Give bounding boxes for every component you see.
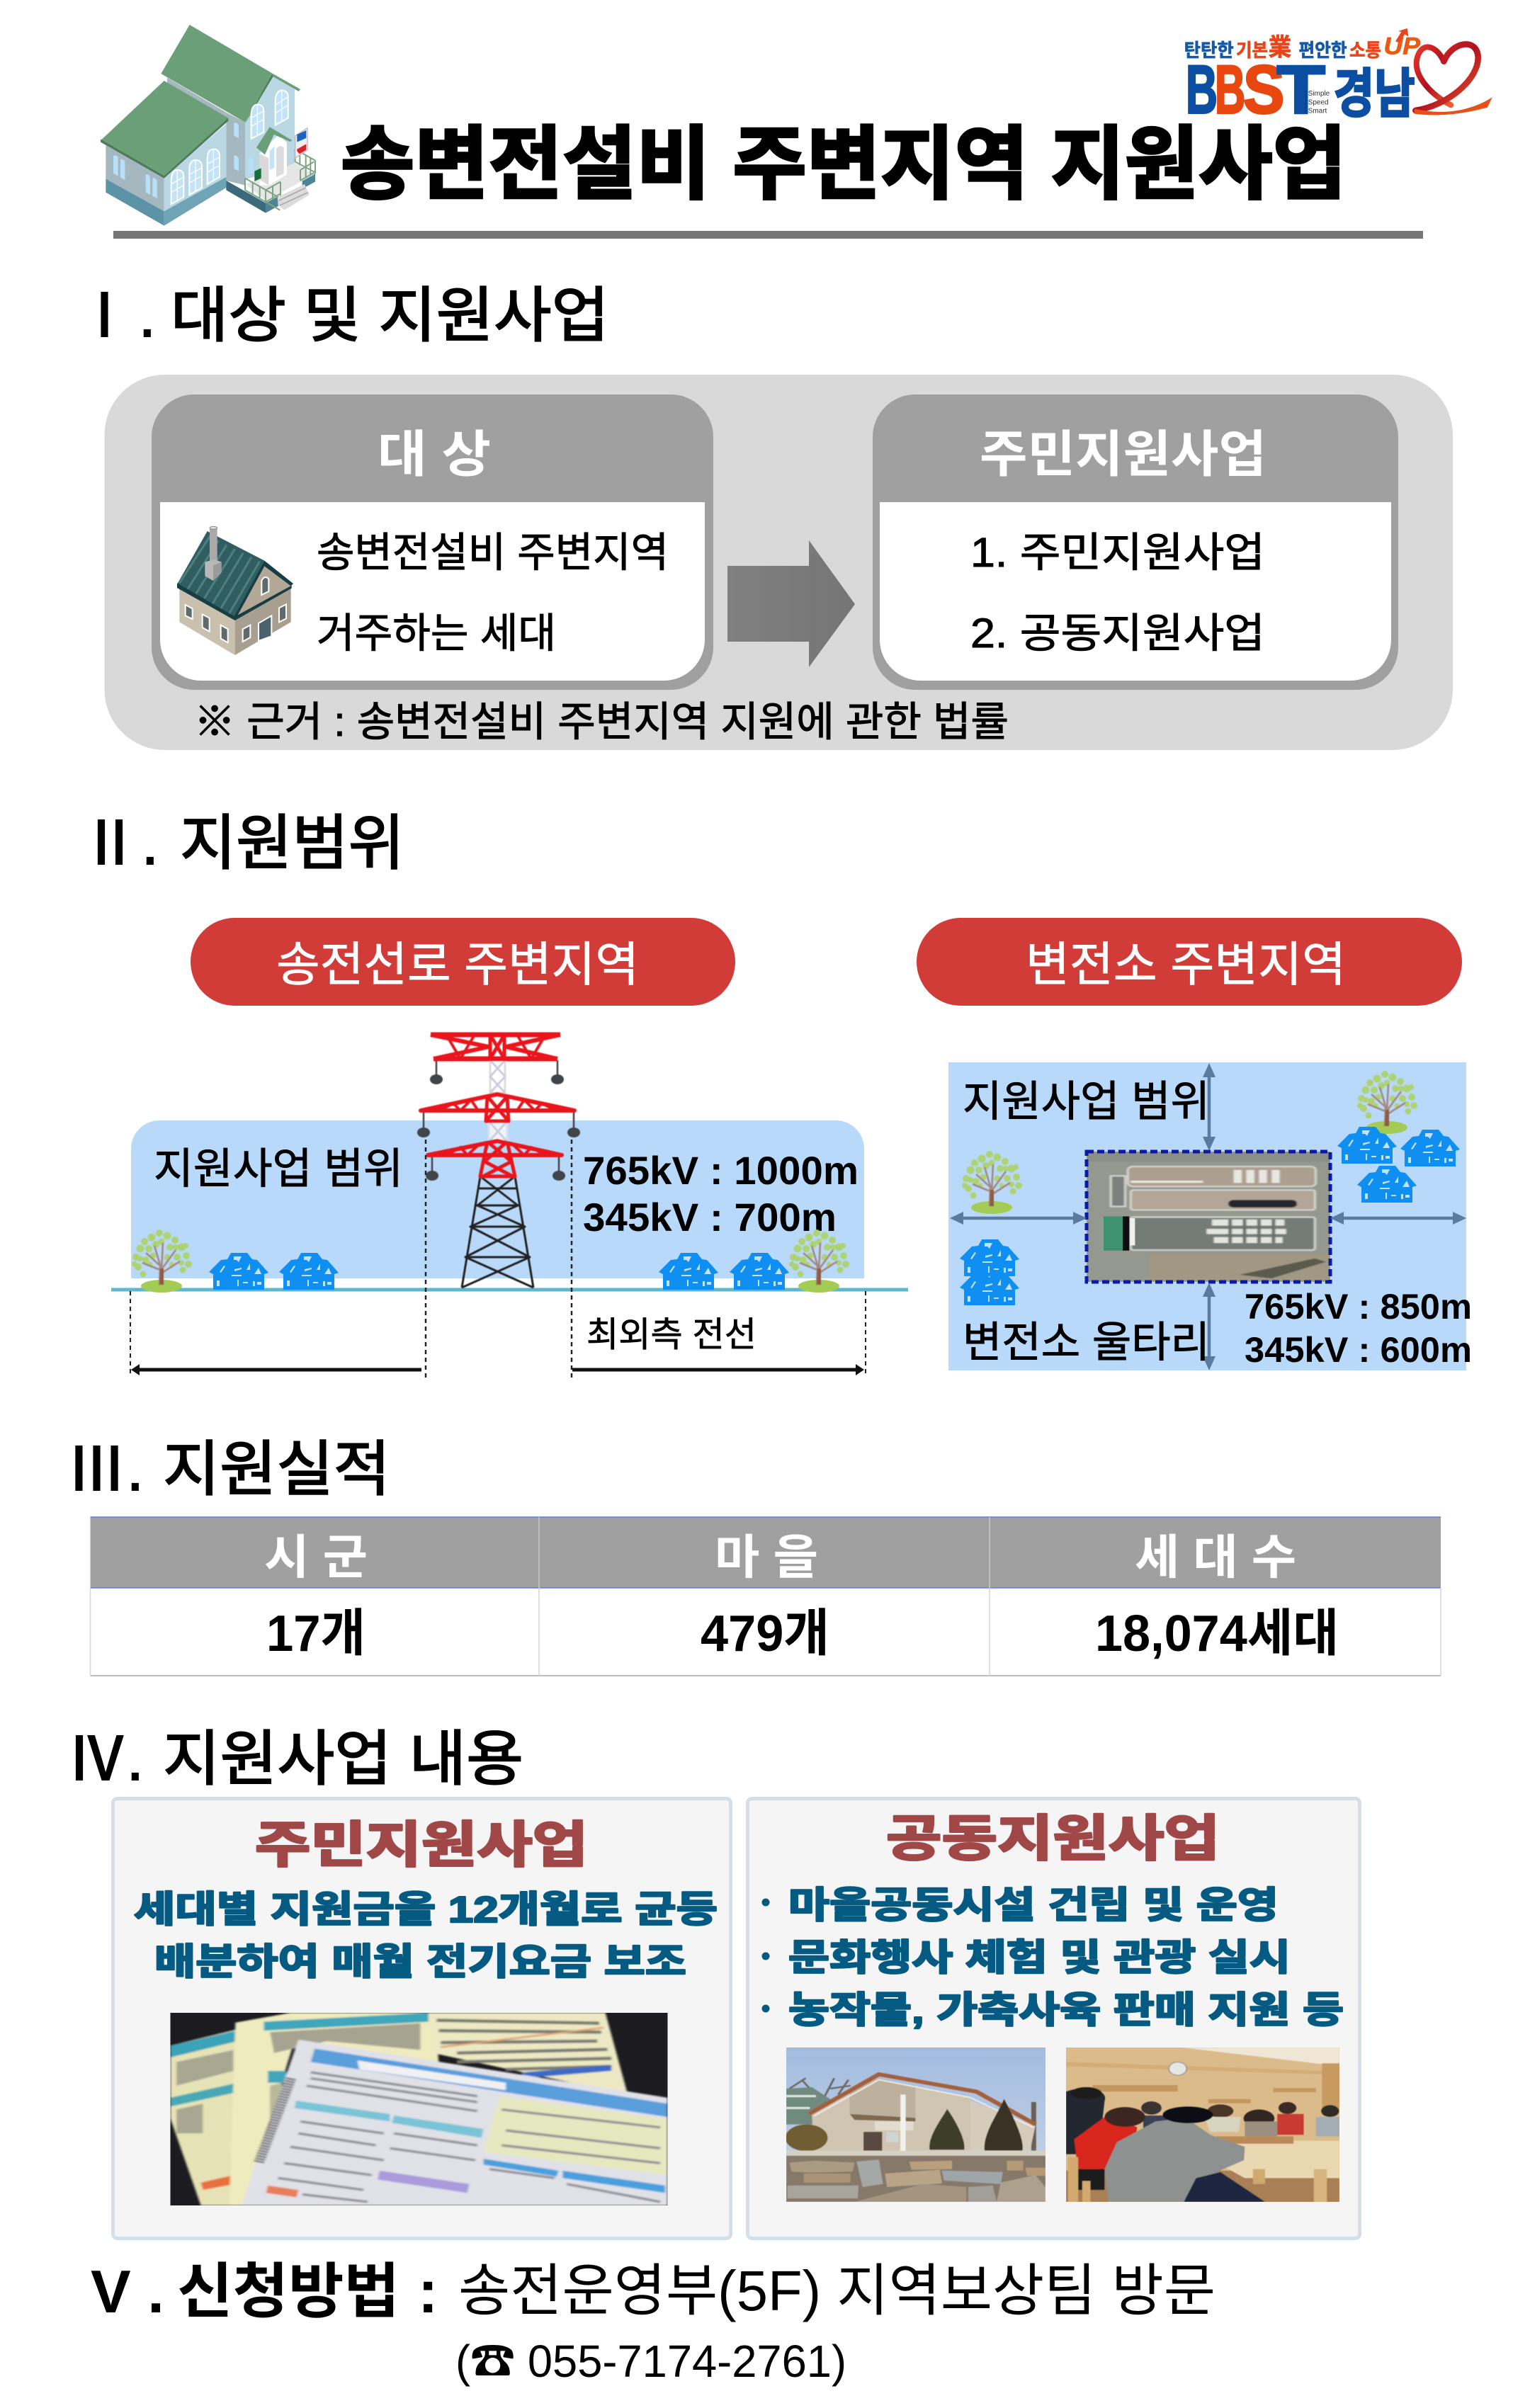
logo wordmark: B [1186, 51, 1218, 127]
panel title: 주민지원사업 [255, 1817, 588, 1873]
chart: substation diagram [948, 1062, 1472, 1370]
bullet list: 농작물, 가축사육 판매 지원 등 [788, 1990, 1344, 2031]
badge: substation area: 변전소 주변지역 [1026, 938, 1346, 992]
aerial photo of substation [1087, 1152, 1330, 1282]
heading: section II: 지원범위 [180, 810, 404, 878]
label: distances: 765kV : 1000m [583, 1148, 858, 1193]
badge: substation area [917, 918, 1462, 1006]
panel description: 배분하여 매월 전기요금 보조 [154, 1942, 686, 1983]
heading: section II: . [142, 810, 159, 878]
table header [264, 1531, 1296, 1584]
text: phone number: (☎ 055-7174-2761) [455, 2336, 846, 2387]
heading: section III [67, 1436, 390, 1504]
logo slogan: UP [1383, 33, 1421, 60]
text: application method: 신청방법 [177, 2259, 400, 2326]
text: application method [91, 2259, 1216, 2326]
card: support [873, 394, 1398, 690]
label: distances [583, 1148, 858, 1239]
logo slogan: 편안한 [1298, 40, 1347, 61]
icons: houses [209, 1253, 789, 1290]
table values: 18,074세대 [1095, 1606, 1339, 1662]
label: distances: 345kV : 600m [1245, 1330, 1472, 1370]
text: target description: 거주하는 세대 [317, 610, 556, 657]
icon: pylon [417, 1035, 580, 1288]
heading: section I: . [139, 283, 156, 350]
label: fence: 변전소 울타리 [963, 1319, 1210, 1366]
heading: section I: Ⅰ [74, 283, 135, 350]
badge: transmission line area [191, 918, 735, 1006]
logo slogan: 탄탄한 [1184, 40, 1234, 61]
panel description: 세대별 지원금을 12개월로 균등 [134, 1890, 718, 1931]
table: results [91, 1517, 1441, 1676]
heading: target: 대 상 [378, 427, 491, 483]
text: application method: 송전운영부(5F) 지역보상팀 방문 [458, 2259, 1216, 2322]
table header: 마 을 [715, 1531, 818, 1584]
heading: section II: Ⅱ [80, 810, 140, 878]
label: outermost wire: 최외측 전선 [586, 1316, 756, 1354]
label: distances: 345kV : 700m [583, 1195, 837, 1239]
text: target description: 송변전설비 주변지역 [317, 530, 669, 576]
label: distances [1245, 1287, 1472, 1370]
photo: activity room [1066, 2048, 1339, 2202]
bullet list: 문화행사 체험 및 관광 실시 [788, 1938, 1291, 1979]
label: distances: 765kV : 850m [1245, 1287, 1472, 1327]
table values [266, 1606, 1339, 1662]
logo slogan: 業 [1269, 34, 1291, 61]
bullet list [762, 1885, 1344, 2031]
table values: 17개 [266, 1606, 366, 1662]
range arrows [950, 1063, 1466, 1370]
logo wordmark: Speed [1308, 98, 1329, 106]
icon: small house [177, 526, 293, 655]
label: support range: 지원사업 범위 [154, 1145, 403, 1193]
note: legal basis: ※ 근거 : 송변전설비 주변지역 지원에 관한 법률 [194, 699, 1009, 745]
logo wordmark: S [1243, 51, 1284, 127]
label: support range: 지원사업 범위 [963, 1078, 1210, 1125]
logo wordmark [1186, 51, 1415, 127]
table values: 479개 [701, 1606, 829, 1662]
logo heart ribbon [1415, 44, 1492, 115]
photo: electricity bills [170, 2013, 667, 2205]
icon: green roof house [101, 25, 316, 226]
logo slogan [1184, 33, 1421, 61]
heading: section I: 대상 및 지원사업 [171, 283, 609, 350]
panel: target and support [105, 375, 1453, 750]
text: target description [317, 530, 669, 657]
logo: BBST 경남 [1184, 28, 1492, 127]
icons: houses [960, 1127, 1460, 1305]
panel title: 공동지원사업 [886, 1811, 1220, 1866]
dashed boundaries [130, 1140, 866, 1378]
text: application method: : [418, 2259, 438, 2326]
title: 송변전설비 주변지역 지원사업 [341, 120, 1347, 209]
text: support items: 1. 주민지원사업 [970, 530, 1265, 576]
card: target [152, 394, 713, 690]
text: application method: V . [91, 2259, 164, 2326]
bullet list: 마을공동시설 건립 및 운영 [788, 1885, 1279, 1926]
icon: tree upper right [1357, 1071, 1417, 1134]
logo wordmark: T [1277, 51, 1325, 127]
range arrows [131, 1364, 864, 1375]
panel: resident support [113, 1799, 731, 2238]
text: support items [970, 530, 1265, 657]
ground line [111, 1288, 908, 1292]
table header: 시 군 [264, 1531, 368, 1584]
photo: village hall [786, 2048, 1046, 2202]
table header: 세 대 수 [1135, 1531, 1296, 1584]
logo wordmark: Smart [1308, 107, 1327, 115]
heading: section IV: Ⅳ. [67, 1726, 144, 1793]
chart: transmission line diagram [111, 1035, 908, 1378]
heading: section II [80, 810, 404, 878]
badge: transmission line area: 송전선로 주변지역 [276, 938, 639, 992]
arrow [727, 540, 855, 667]
logo slogan: 소통 [1349, 40, 1381, 61]
heading: section III: Ⅲ. [67, 1436, 144, 1504]
heading: section IV: 지원사업 내용 [163, 1726, 523, 1793]
logo slogan: 기본 [1236, 40, 1268, 61]
logo wordmark: B [1215, 51, 1245, 127]
heading: section III: 지원실적 [163, 1436, 390, 1504]
text: support items: 2. 공동지원사업 [970, 610, 1265, 657]
logo wordmark: 경남 [1334, 64, 1415, 123]
icon: tree left [962, 1151, 1022, 1214]
icon: tree right [789, 1229, 849, 1293]
icon: tree left [132, 1229, 192, 1293]
panel description [134, 1890, 718, 1983]
heading: support: 주민지원사업 [980, 427, 1266, 483]
logo wordmark: Simple [1308, 90, 1330, 98]
panel: community support [748, 1799, 1360, 2238]
